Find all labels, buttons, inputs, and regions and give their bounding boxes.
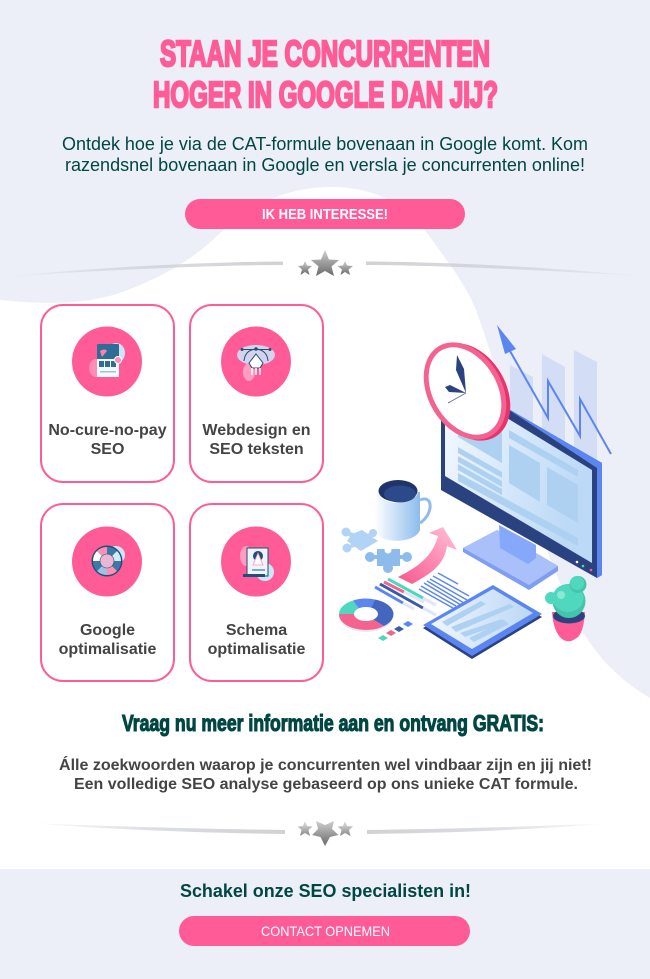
divider with stars (top) [0,250,650,277]
donut chart [339,599,393,632]
chart bars [510,350,597,461]
card: no-cure-no-pay SEO: SEO [91,441,124,458]
coffee mug [375,479,430,541]
intro text [62,134,588,175]
icon: wheel [92,546,125,576]
divider with stars (bottom) [29,821,611,846]
intro text: razendsnel bovenaan in Google en versla je concurrenten online! [65,155,585,175]
illustration: SEO workspace [339,325,611,659]
card: google optimalisatie: Google [80,622,135,639]
footer band [0,869,650,979]
body text: Een volledige SEO analyse gebaseerd op ons unieke CAT formule. [74,776,578,793]
growth arrow [398,527,457,584]
footer heading: Schakel onze SEO specialisten in! [180,881,471,901]
card: schema optimalisatie [190,504,323,681]
card: no-cure-no-pay SEO [41,305,174,482]
title [153,33,498,115]
button: ik heb interesse: IK HEB INTERESSE! [262,207,388,223]
report lines [375,573,469,615]
zigzag arrow [497,325,611,454]
intro text: Ontdek hoe je via de CAT-formule bovenaan in Google komt. Kom [62,134,588,154]
body text: Álle zoekwoorden waarop je concurrenten wel vindbaar zijn en jij niet! [59,755,592,774]
puzzle pieces [342,528,412,573]
body text [59,755,592,793]
card: schema optimalisatie: optimalisatie [208,641,306,658]
icon: website device [89,343,125,377]
card: webdesign en SEO teksten: Webdesign en [202,422,311,439]
monitor [441,370,602,578]
icon: document [240,546,274,581]
card: webdesign en SEO teksten [190,305,323,482]
button: contact opnemen: CONTACT OPNEMEN [261,923,390,939]
card: google optimalisatie [41,504,174,681]
clock [407,327,527,456]
card: webdesign en SEO teksten: SEO teksten [209,441,304,458]
white wave shape [0,187,650,869]
button: ik heb interesse [185,199,465,229]
button: contact opnemen [179,916,470,946]
title: STAAN JE CONCURRENTEN [160,33,490,74]
card: no-cure-no-pay SEO: No-cure-no-pay [48,422,167,439]
card: google optimalisatie: optimalisatie [59,641,156,658]
card: schema optimalisatie: Schema [226,622,287,639]
monitor stand [463,525,558,590]
tablet [423,585,542,659]
cactus [545,576,586,641]
icon: pen tool [237,345,275,381]
legend squares [378,621,413,641]
